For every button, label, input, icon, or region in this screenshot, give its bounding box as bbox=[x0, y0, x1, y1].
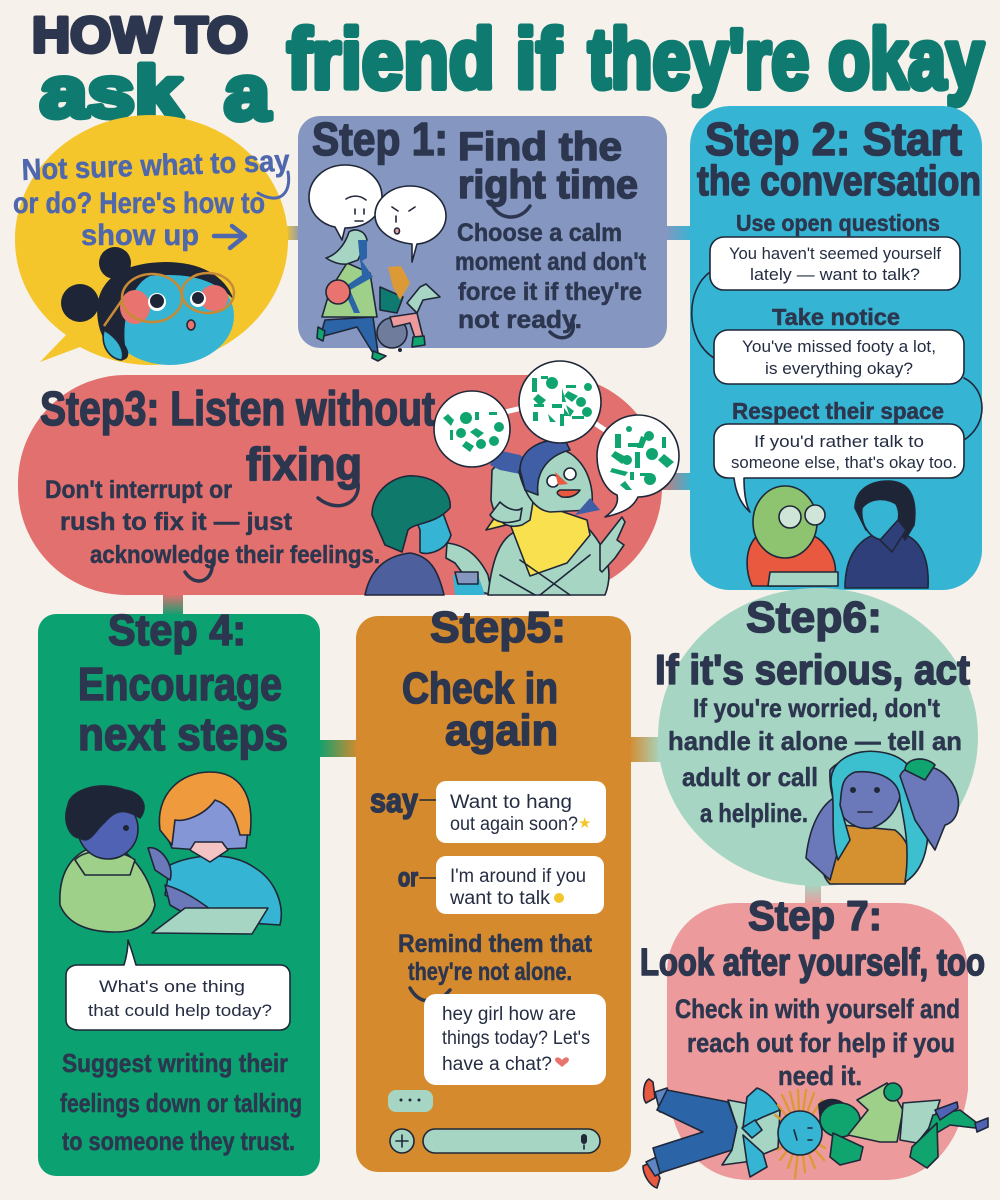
step 5 heading: Check in bbox=[402, 664, 558, 713]
step 1 body text bbox=[455, 219, 647, 338]
step 7 heading bbox=[640, 892, 985, 984]
step 3 body text: rush to fix it — just bbox=[60, 508, 293, 536]
step 4 heading bbox=[78, 606, 288, 760]
step 1 heading bbox=[312, 113, 638, 217]
speech box 3: someone else, that's okay too. bbox=[731, 453, 957, 472]
step 1 body text: not ready. bbox=[458, 306, 582, 334]
reminder text: they're not alone. bbox=[408, 958, 572, 986]
step 6 heading: Step6: bbox=[746, 593, 882, 642]
panel: step 2 bbox=[690, 106, 982, 590]
step 3 body text: Don't interrupt or bbox=[45, 476, 232, 504]
subheading: respect their space: Respect their space bbox=[732, 398, 944, 424]
step 3 heading bbox=[40, 383, 435, 506]
step 3 heading: fixing bbox=[246, 438, 362, 490]
chat bubble: hang out: Want to hang bbox=[450, 792, 572, 813]
label: or: or bbox=[398, 862, 418, 892]
chat bubble: hang out: out again soon? bbox=[450, 814, 578, 835]
intro text: or do? Here's how to bbox=[13, 187, 265, 220]
panel: step 7 bbox=[640, 892, 988, 1188]
step 7 body text bbox=[675, 994, 960, 1091]
step 4 heading: Step 4: bbox=[108, 606, 246, 655]
connectors between panels bbox=[163, 226, 821, 905]
illustration: two friends writing in a notebook bbox=[60, 772, 281, 934]
step 4 heading: next steps bbox=[78, 708, 288, 760]
step 4 body text bbox=[60, 1048, 302, 1156]
subheading: use open questions: Use open questions bbox=[736, 210, 940, 236]
speech box: that could help today? bbox=[88, 1001, 272, 1020]
step 1 heading: Step 1: bbox=[312, 113, 448, 165]
step 2 heading: Step 2: Start bbox=[705, 113, 962, 165]
step 7 body text: need it. bbox=[778, 1061, 862, 1091]
step 4 body text: Suggest writing their bbox=[62, 1048, 288, 1078]
step 4 body text: to someone they trust. bbox=[62, 1126, 295, 1156]
illustration: two friends at a table bbox=[747, 481, 928, 588]
illustration: worried girl on phone bbox=[806, 751, 958, 884]
step 5 heading: again bbox=[445, 706, 558, 755]
reminder text bbox=[398, 930, 593, 1001]
chat bubble: around to talk bbox=[436, 856, 604, 914]
speech box 2: You've missed footy a lot, bbox=[742, 337, 936, 356]
step 1 body text: Choose a calm bbox=[457, 219, 622, 247]
step 1 body text: moment and don't bbox=[455, 248, 647, 276]
speech box 1: You haven't seemed yourself bbox=[729, 244, 941, 263]
intro text: Not sure what to say bbox=[21, 145, 290, 187]
speech box 2 bbox=[714, 330, 964, 384]
chat bubble: hey girl: have a chat? bbox=[442, 1054, 552, 1075]
title line: how to: HOW TO bbox=[32, 7, 248, 63]
step 6 heading bbox=[655, 593, 970, 693]
label: say: say bbox=[370, 782, 418, 820]
title word: a: a bbox=[224, 48, 271, 136]
step 4 heading: Encourage bbox=[78, 658, 282, 710]
step 5 heading: Step5: bbox=[430, 603, 566, 652]
step 1 heading: right time bbox=[458, 163, 638, 207]
panel: step 4 bbox=[38, 606, 320, 1176]
illustration: three thought bubbles bbox=[434, 361, 679, 517]
title word: ask: ask bbox=[40, 53, 183, 133]
panel: intro speech bubble bbox=[13, 115, 290, 365]
step 3 body text bbox=[45, 476, 380, 581]
illustration: friend walking and friend in wheelchair with dog bbox=[317, 230, 440, 361]
title bbox=[32, 7, 984, 136]
illustration: two friends lying on the ground bbox=[643, 1079, 988, 1188]
chat bubble: hang out: ★ bbox=[578, 815, 591, 832]
title words: friend if: friend if bbox=[287, 12, 562, 106]
chat bubble: around to talk: I'm around if you bbox=[450, 866, 586, 887]
reminder text: Remind them that bbox=[398, 930, 593, 958]
speech box 1: lately — want to talk? bbox=[750, 265, 920, 284]
step 1 body text: force it if they're bbox=[458, 278, 642, 306]
step 6 body text: handle it alone — tell an bbox=[668, 726, 962, 756]
speech box bbox=[66, 940, 290, 1030]
step 7 heading: Step 7: bbox=[748, 892, 882, 939]
chat bubble: hang out bbox=[436, 781, 606, 843]
speech box 3 bbox=[714, 424, 964, 512]
chat bubble: hey girl: things today? Let's bbox=[442, 1028, 590, 1049]
speech box 2: is everything okay? bbox=[765, 359, 913, 378]
panel: step 3 bbox=[18, 361, 679, 595]
step 2 heading bbox=[697, 113, 981, 204]
connecting curves between speech boxes bbox=[692, 272, 982, 440]
chat bubble: around to talk: want to talk bbox=[449, 888, 551, 909]
step 3 body text: acknowledge their feelings. bbox=[90, 541, 380, 569]
step 3 heading: Step3: Listen without bbox=[40, 383, 435, 436]
illustration: worried friend with crowded thoughts bbox=[486, 440, 625, 595]
intro text bbox=[13, 145, 290, 252]
step 5 heading bbox=[402, 603, 566, 755]
step 6 body text: adult or call bbox=[682, 762, 818, 792]
speech box 3: If you'd rather talk to bbox=[754, 432, 924, 451]
chat bubble: hey girl: hey girl how are bbox=[442, 1004, 576, 1025]
panel: step 1 bbox=[298, 113, 667, 361]
illustration: two thought bubbles bbox=[309, 165, 446, 262]
label: or bbox=[398, 862, 450, 892]
chat bubble: hey girl bbox=[424, 994, 606, 1085]
step 6 body text: a helpline. bbox=[700, 798, 808, 828]
illustration: listener seen from behind bbox=[365, 476, 492, 595]
step 7 body text: reach out for help if you bbox=[687, 1028, 955, 1058]
icon: character with buns and glasses bbox=[61, 247, 234, 365]
step 6 heading: If it's serious, act bbox=[655, 646, 970, 693]
typing indicator bubble bbox=[388, 1090, 433, 1112]
panel: step 5 bbox=[356, 603, 631, 1172]
intro text: show up bbox=[81, 219, 199, 252]
message input bar bbox=[390, 1129, 600, 1153]
speech box: What's one thing bbox=[99, 977, 245, 996]
step 4 body text: feelings down or talking bbox=[60, 1088, 302, 1118]
subheading: take notice: Take notice bbox=[772, 304, 900, 330]
panel: step 6 bbox=[655, 588, 978, 886]
step 6 body text: If you're worried, don't bbox=[693, 693, 940, 723]
speech box 1 bbox=[710, 237, 960, 290]
step 6 body text bbox=[668, 693, 962, 828]
step 1 heading: Find the bbox=[458, 125, 622, 169]
